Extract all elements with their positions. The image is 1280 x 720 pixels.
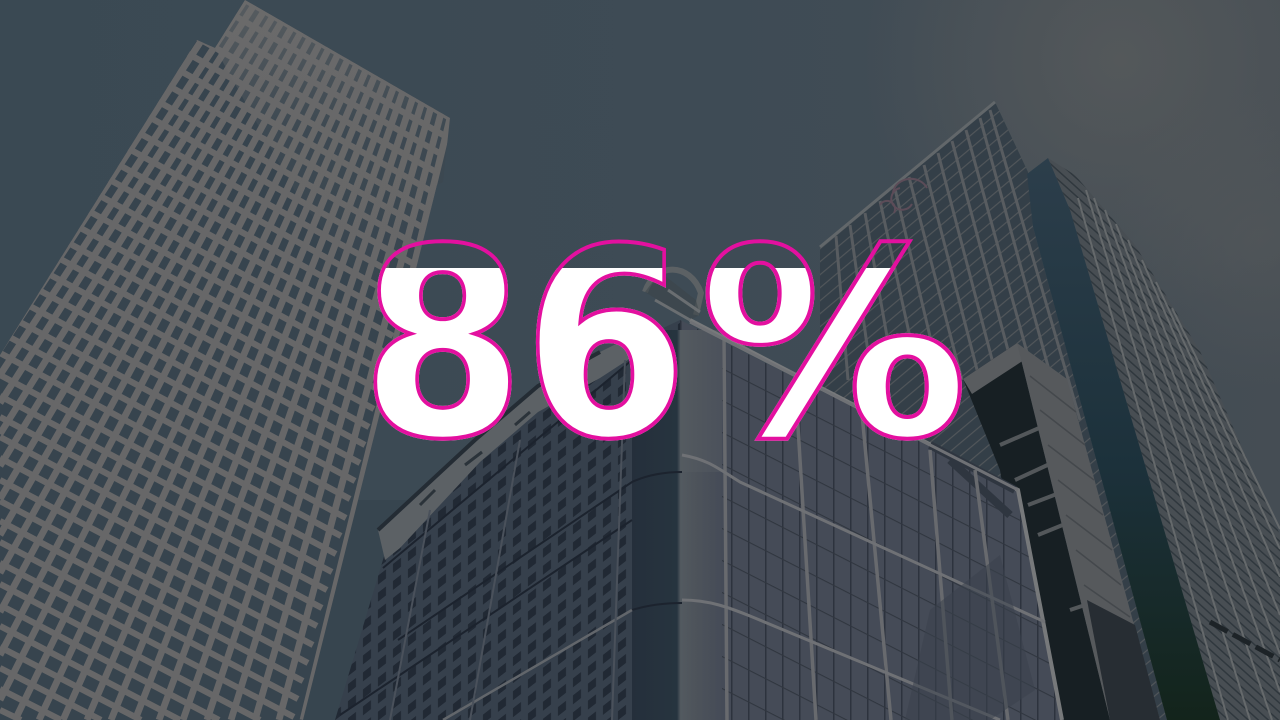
roof louvre strip (378, 332, 640, 560)
left face bands (340, 360, 682, 720)
right face (680, 320, 1062, 720)
light slab (1017, 343, 1160, 720)
percent sign: % (699, 193, 968, 497)
roof terrace louvres (930, 445, 1015, 515)
roof line of right face (690, 320, 1062, 720)
upper stone panel by corner (680, 330, 722, 472)
centre glass building (335, 270, 1062, 720)
floor lines (0, 0, 450, 720)
right tower: blue glass band (1027, 158, 1220, 720)
recessed dark floors (963, 343, 1110, 720)
washed upper right of tower (215, 0, 450, 330)
left face (335, 320, 680, 720)
headline figure: 86% partly filled white with magenta outline (361, 193, 968, 497)
right tower: left face (820, 102, 1167, 720)
tower body (0, 0, 450, 720)
right face mullions (724, 340, 1008, 720)
column lines (0, 0, 450, 720)
left tower (0, 0, 450, 720)
dark glass panel (1087, 600, 1160, 720)
digit 8: 8 (361, 193, 524, 497)
cloud reflection on glass (905, 555, 1035, 720)
rounded corner strip (632, 330, 722, 720)
right tower (820, 102, 1280, 720)
right face floor bands (682, 322, 1045, 720)
roof lip (963, 343, 1024, 394)
window grid (0, 0, 450, 720)
rooftop arc (645, 270, 701, 315)
logo on right tower (880, 179, 927, 213)
middle slab building (963, 343, 1160, 720)
right tower: right face (1048, 158, 1280, 720)
digit 6: 6 (523, 193, 688, 497)
